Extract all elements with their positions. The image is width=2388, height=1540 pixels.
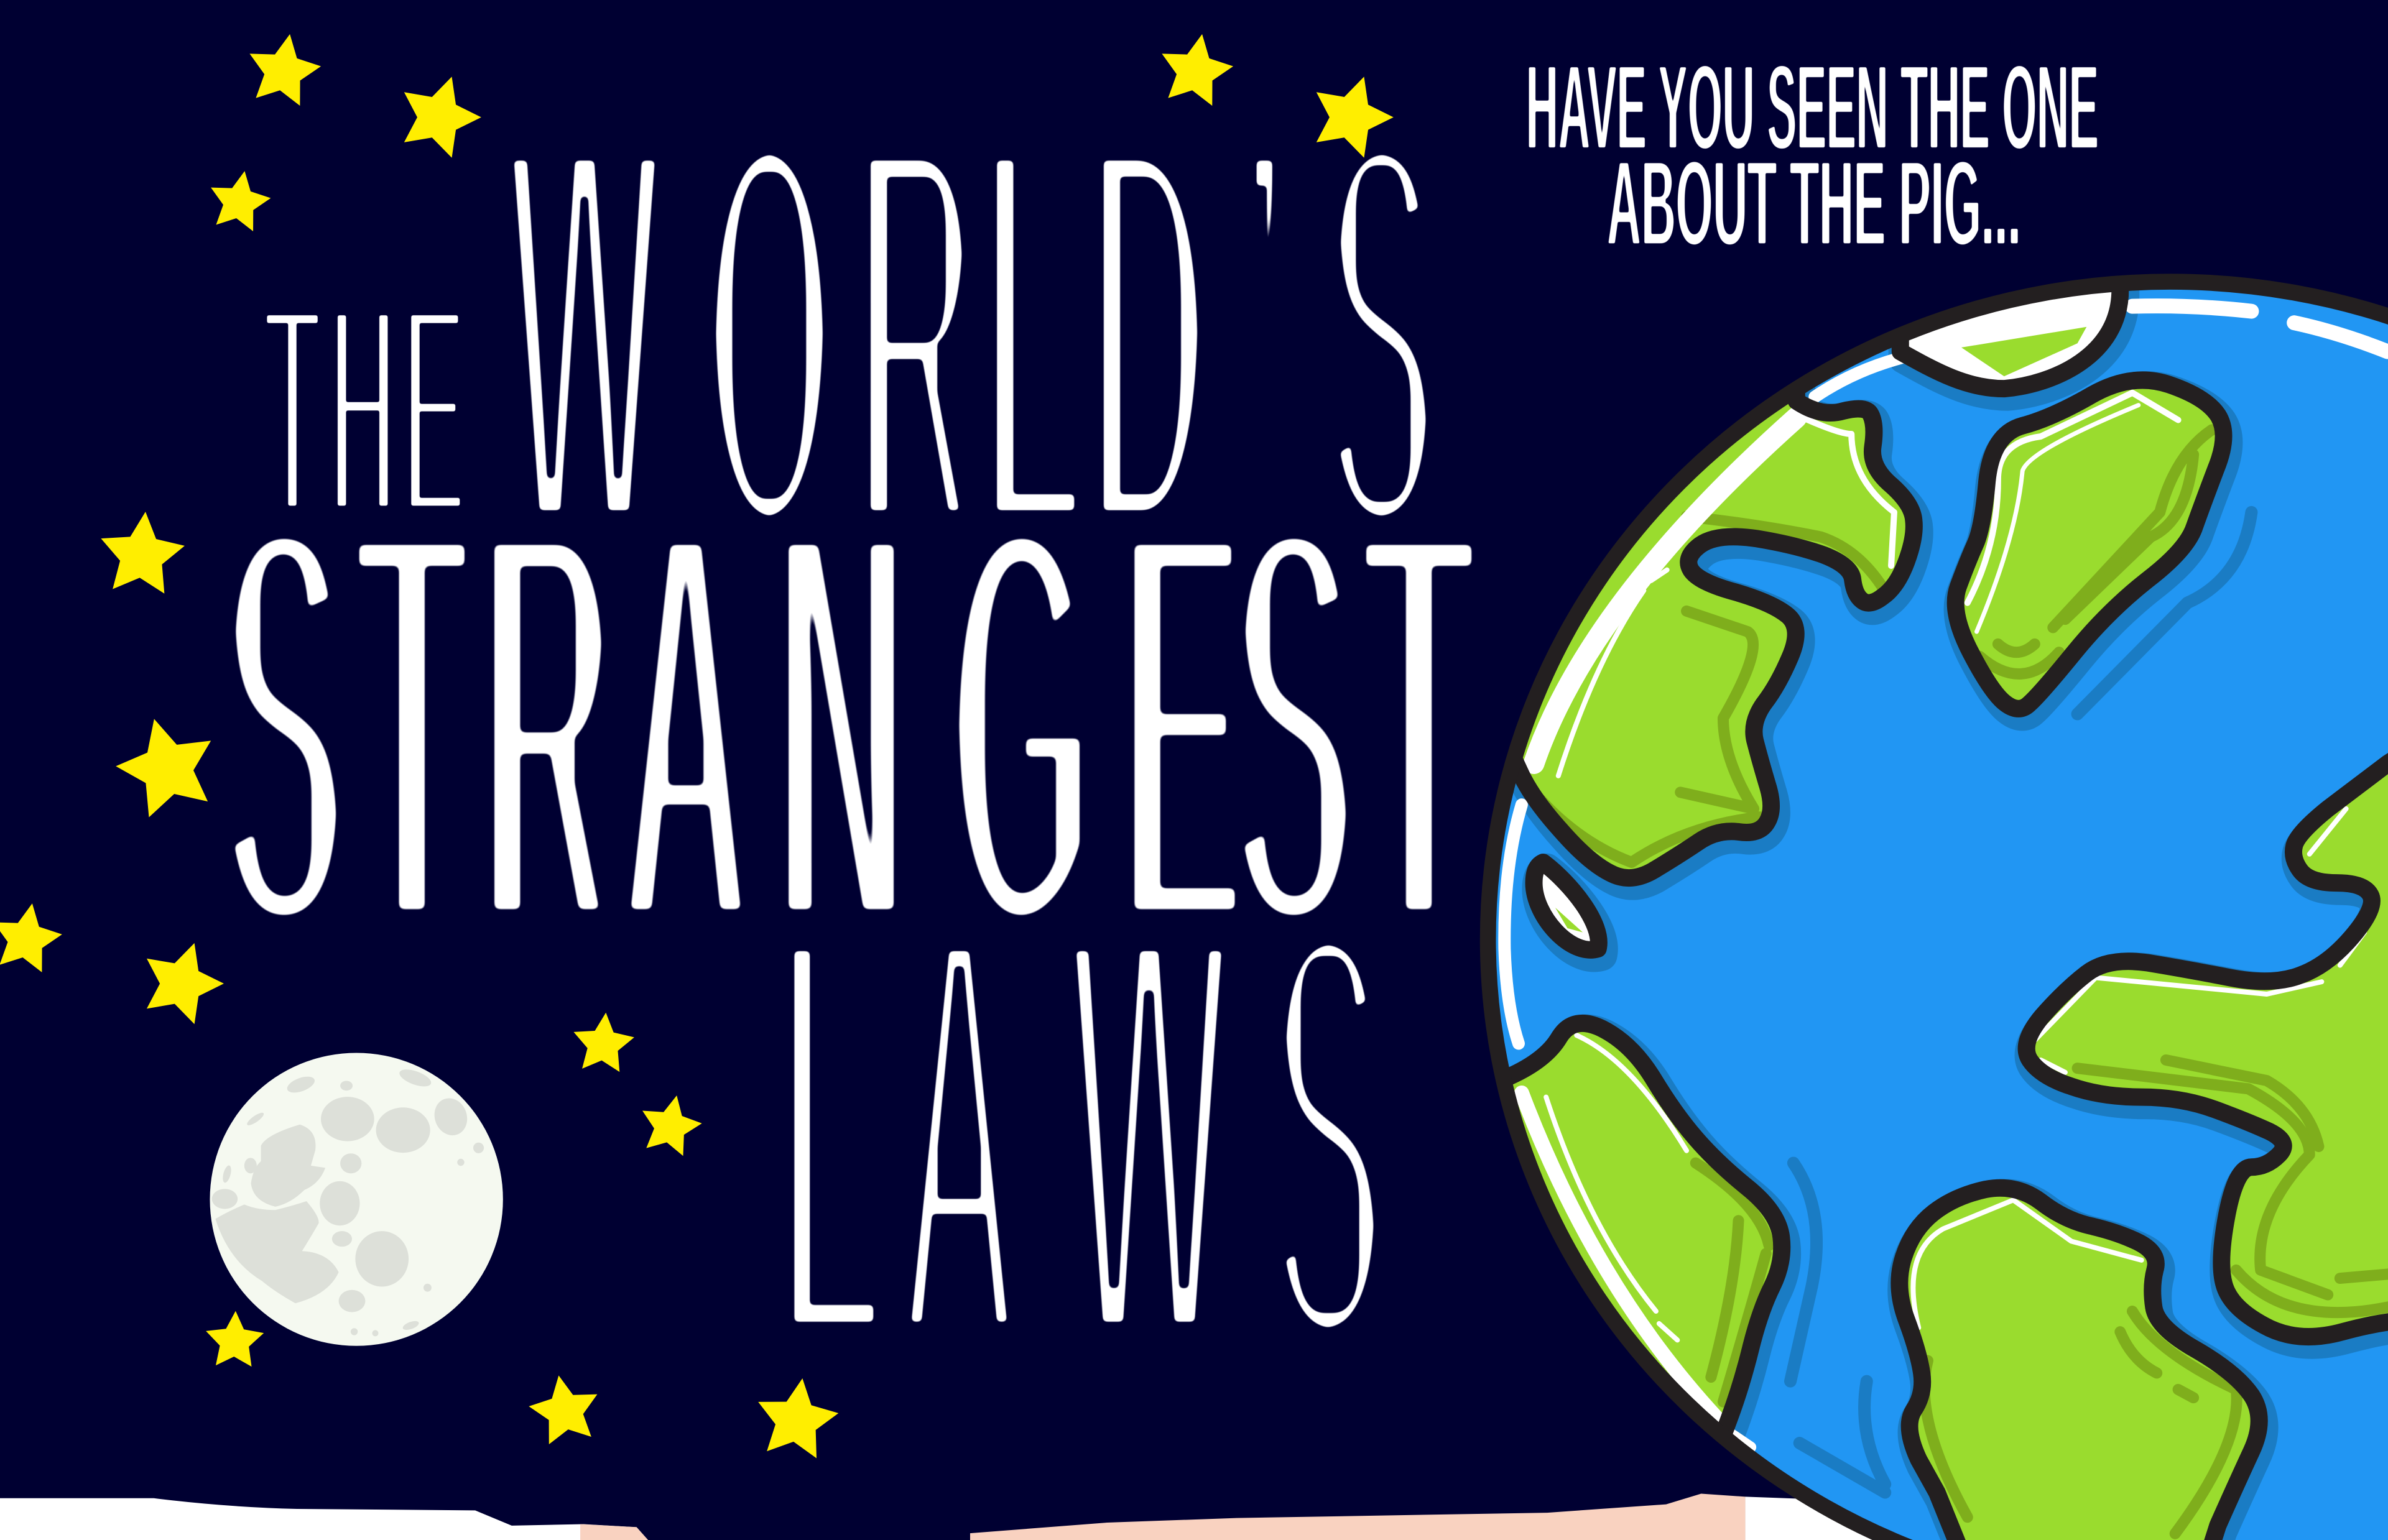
stars xyxy=(0,28,1402,1460)
land shading xyxy=(1534,430,2387,1534)
title word: LAWS: LAWS xyxy=(778,792,1386,1478)
title word: THE: THE xyxy=(265,244,464,577)
bottom strip: white panel and skin-tone shapes xyxy=(0,1493,1919,1540)
ocean shadow halos xyxy=(1495,256,2388,1540)
ocean current strokes xyxy=(1790,512,2251,1493)
moon illustration xyxy=(210,1053,503,1346)
earth globe illustration xyxy=(1488,249,2388,1540)
land highlights xyxy=(1546,393,2364,1340)
continents xyxy=(1491,249,2388,1540)
land masses xyxy=(1491,249,2388,1540)
title word: WORLD'S: WORLD’S xyxy=(507,12,1437,658)
globe outline xyxy=(1488,282,2388,1540)
land outlines xyxy=(1491,249,2388,1540)
title xyxy=(224,12,1473,1478)
white rim highlights xyxy=(1504,306,2387,1447)
title word: STRANGEST: STRANGEST xyxy=(224,393,1473,1058)
ocean disc xyxy=(1488,282,2388,1540)
tagline xyxy=(1526,39,2099,271)
